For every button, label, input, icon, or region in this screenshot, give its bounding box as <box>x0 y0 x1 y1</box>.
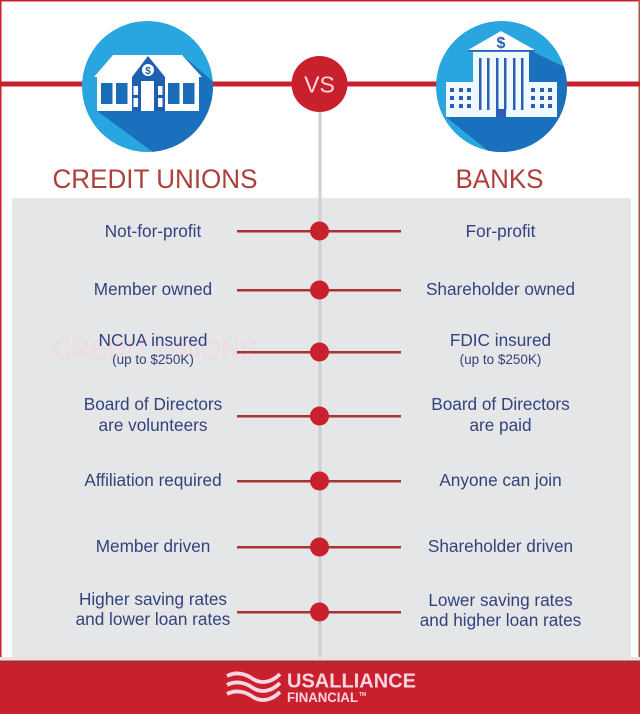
logo waves <box>227 673 280 700</box>
credit union attributes: are volunteers <box>99 415 207 435</box>
bank attributes: (up to $250K) <box>460 352 541 367</box>
bank attributes: Shareholder driven <box>428 536 573 556</box>
header red line <box>0 82 640 86</box>
credit union attributes <box>76 221 230 629</box>
VS badge: VS <box>304 72 335 98</box>
credit union attributes: Higher saving rates <box>79 589 227 609</box>
panel: comparison background <box>12 198 631 661</box>
bank attributes: For-profit <box>466 221 536 241</box>
bank attributes: Anyone can join <box>439 470 562 490</box>
logo wordmark <box>287 670 416 705</box>
bank attributes: FDIC insured <box>450 330 551 350</box>
faint ghost heading: CREDIT UNIONS <box>52 334 258 364</box>
credit union attributes: Board of Directors <box>84 394 222 414</box>
logo wordmark: FINANCIAL <box>287 690 358 705</box>
logo wordmark: TM <box>359 692 366 698</box>
credit union attributes: Member driven <box>96 536 210 556</box>
bank attributes: and higher loan rates <box>420 610 581 630</box>
bank attributes: are paid <box>469 415 532 435</box>
bank attributes: Board of Directors <box>431 394 570 414</box>
credit union attributes: Member owned <box>94 279 212 299</box>
icon: bank building <box>436 21 575 158</box>
logo wordmark: USALLIANCE <box>287 670 416 692</box>
center vertical divider <box>318 100 322 661</box>
VS badge <box>292 56 348 112</box>
credit union attributes: NCUA insured <box>99 330 207 350</box>
icon: credit union building: $ <box>145 66 151 77</box>
connector rows <box>237 222 401 622</box>
heading: credit unions: CREDIT UNIONS <box>52 164 258 194</box>
credit union attributes: Affiliation required <box>84 470 222 490</box>
bank attributes: Shareholder owned <box>426 279 575 299</box>
credit union attributes: and lower loan rates <box>76 609 230 629</box>
bank attributes <box>420 221 581 630</box>
icon: credit union building <box>82 21 216 155</box>
bank attributes: Lower saving rates <box>428 590 573 610</box>
icon: bank building: $ <box>497 35 506 52</box>
heading: banks: BANKS <box>456 164 544 194</box>
credit union attributes: (up to $250K) <box>112 352 194 367</box>
footer band <box>0 660 640 714</box>
credit union attributes: Not-for-profit <box>105 221 201 241</box>
